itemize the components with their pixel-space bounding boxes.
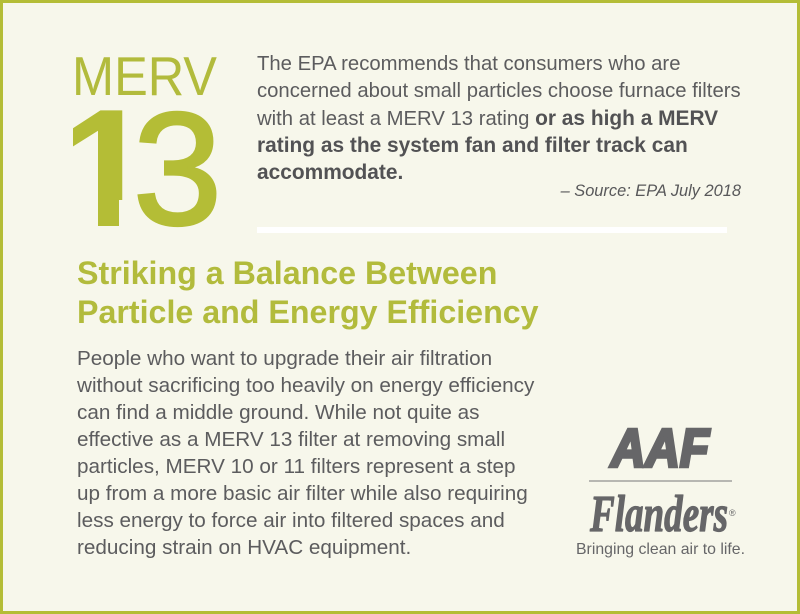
body paragraph: less energy to force air into filtered spaces and	[77, 508, 505, 532]
EPA recommendation text: The EPA recommends that consumers who are	[257, 52, 680, 74]
EPA recommendation text: accommodate.	[257, 160, 403, 184]
heading: Particle and Energy Efficiency	[77, 294, 539, 330]
tagline: Bringing clean air to life.	[576, 541, 745, 558]
heading	[77, 254, 539, 330]
body paragraph: without sacrificing too heavily on energy efficiency	[77, 374, 534, 397]
body paragraph: particles, MERV 10 or 11 filters represent a step	[77, 455, 515, 478]
heading: Striking a Balance Between	[77, 254, 497, 290]
registered mark: ®	[729, 508, 736, 518]
body paragraph: effective as a MERV 13 filter at removing small	[77, 428, 505, 451]
body paragraph: can find a middle ground. While not quite as	[77, 401, 480, 424]
MERV label: MERV	[72, 45, 217, 107]
EPA recommendation text: rating as the system fan and filter track can	[257, 134, 688, 156]
MERV 13 badge	[60, 45, 222, 235]
AAF Flanders logo	[576, 420, 745, 558]
EPA recommendation text: with at least a MERV 13 rating or as high a MERV	[257, 106, 718, 130]
EPA recommendation text: concerned about small particles choose furnace filters	[257, 80, 741, 102]
body paragraph: reducing strain on HVAC equipment.	[77, 536, 411, 558]
body paragraph	[77, 347, 534, 558]
body paragraph: up from a more basic air filter while also requiring	[77, 482, 528, 505]
EPA recommendation text	[257, 52, 741, 184]
AAF wordmark: AAF	[609, 420, 711, 478]
logo rule	[589, 480, 732, 482]
source citation: – Source: EPA July 2018	[561, 182, 741, 200]
body paragraph: People who want to upgrade their air filtration	[77, 347, 492, 370]
13 numeral	[60, 74, 222, 262]
divider	[257, 227, 727, 233]
